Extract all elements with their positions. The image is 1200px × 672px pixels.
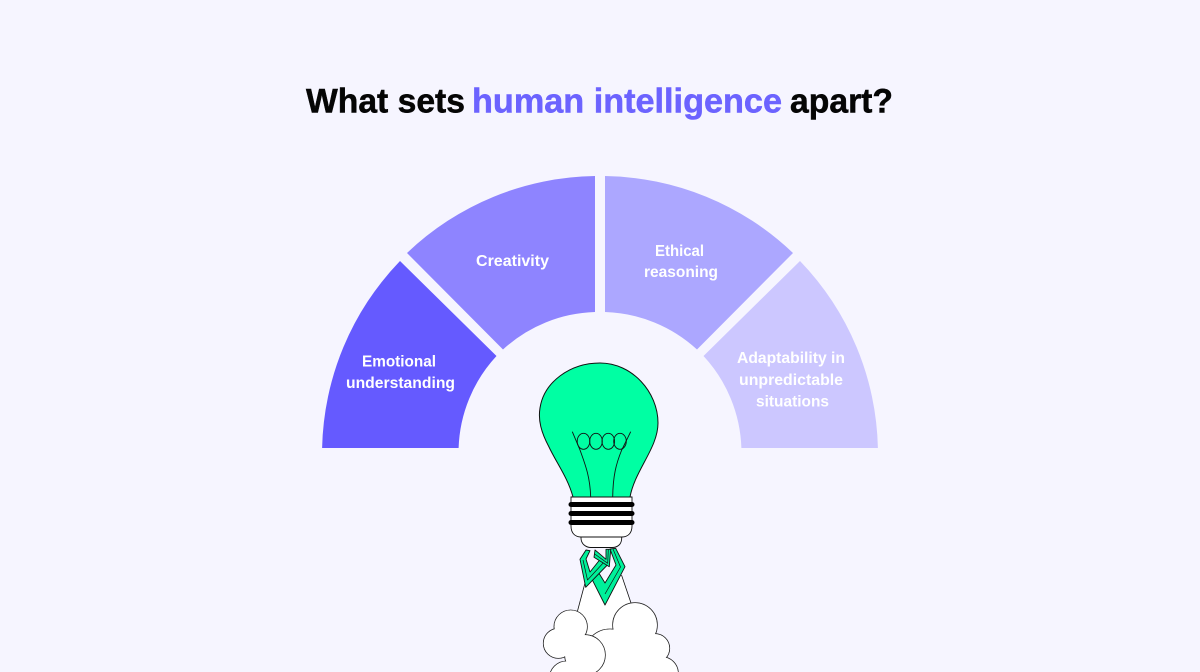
icon: light bulb rocket <box>539 363 678 672</box>
panel: ethical reasoning segment <box>605 176 793 350</box>
panel: emotional understanding segment <box>322 261 496 448</box>
panel: emotional understanding segment: understanding <box>346 375 455 392</box>
title: apart? <box>790 82 893 120</box>
smoke clouds <box>543 603 678 672</box>
panel: adaptability segment: situations <box>756 394 829 410</box>
title: human intelligence <box>472 82 782 120</box>
bulb glass <box>539 363 658 497</box>
panel: adaptability segment: Adaptability in <box>737 350 845 367</box>
base stripes <box>571 504 632 522</box>
panel: emotional understanding segment: Emotional <box>362 354 436 370</box>
panel: ethical reasoning segment: Ethical <box>655 243 704 260</box>
filament <box>572 432 631 497</box>
panel: adaptability segment <box>704 261 878 448</box>
flame ribbons <box>580 548 625 605</box>
panel: creativity segment: Creativity <box>476 253 549 270</box>
panel: ethical reasoning segment: reasoning <box>644 264 718 281</box>
smoke trail <box>577 575 640 640</box>
title <box>306 82 893 120</box>
bulb base <box>571 497 632 537</box>
bulb neck <box>581 535 622 548</box>
panel: creativity segment <box>407 176 595 350</box>
panel: adaptability segment: unpredictable <box>739 372 843 389</box>
title: What sets <box>306 82 465 120</box>
